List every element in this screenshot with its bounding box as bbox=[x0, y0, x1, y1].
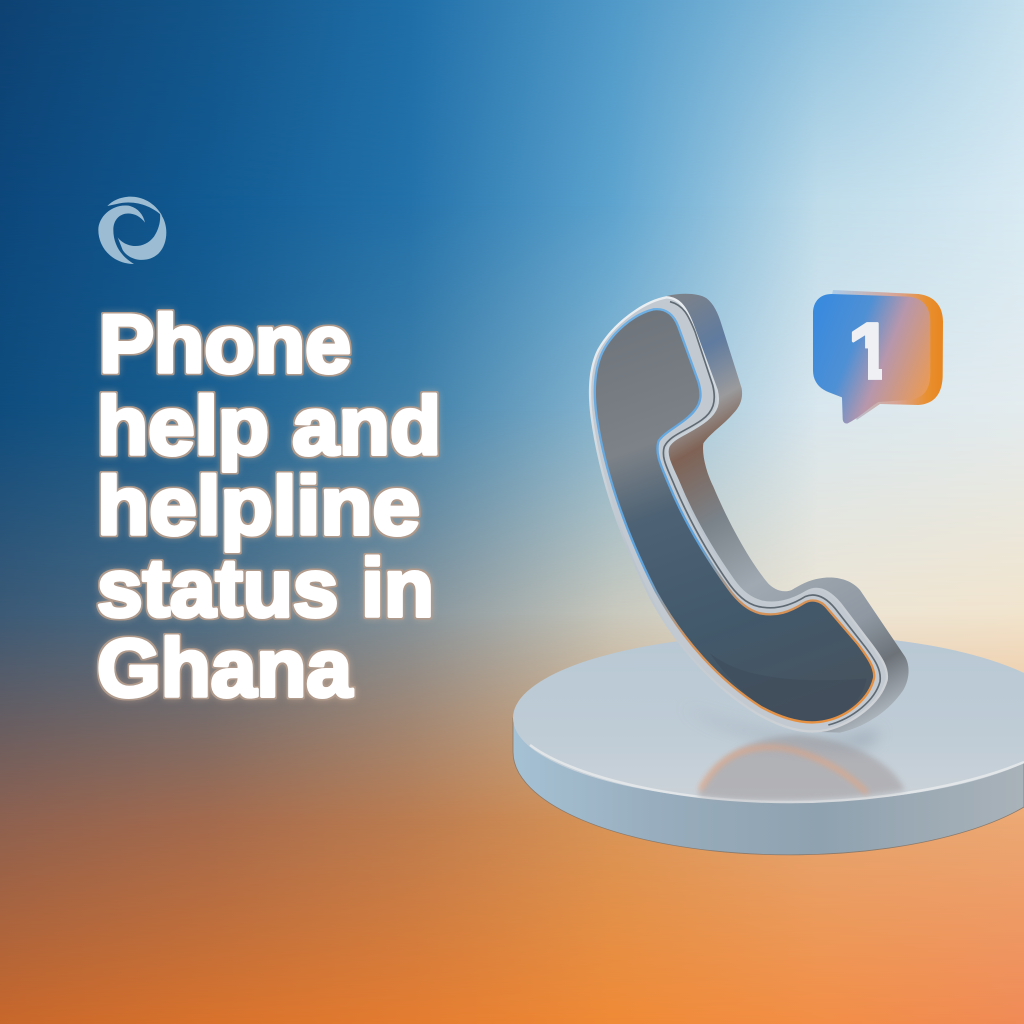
title: helpline bbox=[97, 461, 420, 552]
soft contact shadow bbox=[680, 705, 880, 746]
disc top face bbox=[513, 634, 1024, 802]
icon: telephone handset bbox=[590, 294, 909, 733]
logo: swirl mark bbox=[98, 197, 166, 264]
reflection of phone bbox=[698, 735, 905, 801]
handset side extrusion bbox=[637, 294, 909, 733]
handset silver rim bbox=[590, 297, 887, 731]
orange reflection arc bbox=[700, 747, 867, 793]
title: status in bbox=[97, 543, 434, 634]
handset front face bbox=[595, 309, 874, 722]
notification bubble bbox=[813, 290, 943, 423]
bubble number: 1 bbox=[848, 306, 892, 395]
bubble side bbox=[830, 290, 943, 420]
disc side wall bbox=[513, 700, 1024, 855]
title: help and bbox=[97, 381, 441, 472]
handset dark groove line bbox=[663, 302, 880, 725]
platform disc bbox=[513, 634, 1024, 855]
handset face shadow band bbox=[710, 653, 867, 721]
bubble face bbox=[813, 294, 930, 423]
title: Ghana bbox=[97, 623, 353, 714]
title: Phone bbox=[99, 299, 351, 390]
disc rim highlight bbox=[530, 745, 1024, 802]
